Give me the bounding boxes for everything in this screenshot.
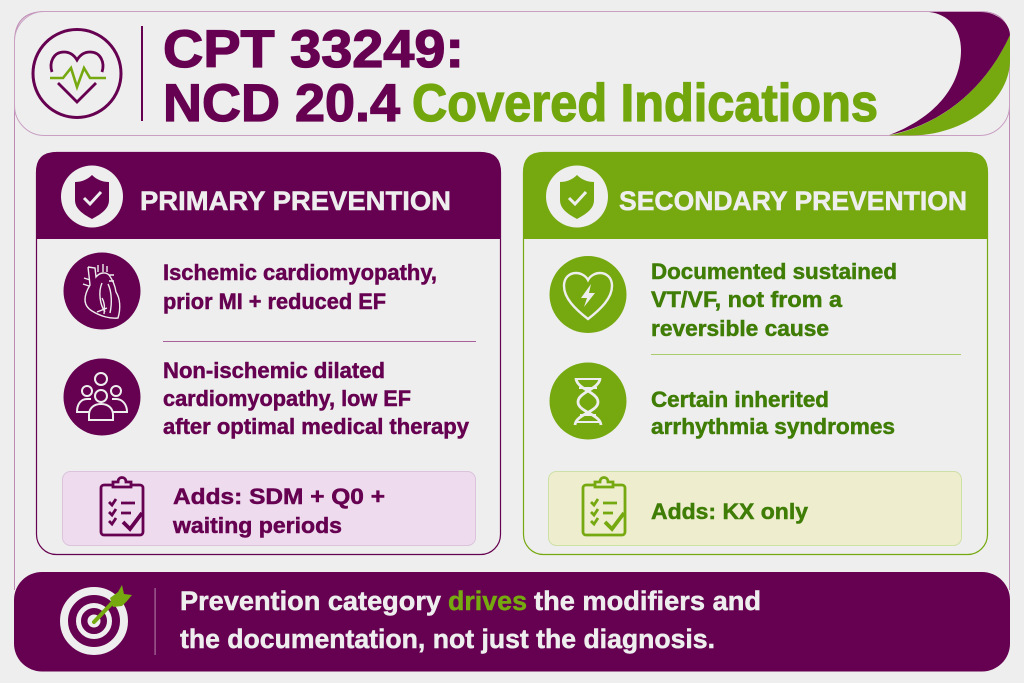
footer banner xyxy=(14,572,1010,672)
panel: secondary prevention xyxy=(523,152,988,554)
title: NCD 20.4 xyxy=(163,74,401,133)
footer message: the modifiers and xyxy=(534,586,761,616)
text: adds SDM Q0 waiting periods xyxy=(172,484,385,538)
primary header bar xyxy=(36,152,501,239)
text: adds SDM Q0 waiting periods: Adds: SDM + Q0 + xyxy=(173,484,385,509)
icon: checklist clipboard xyxy=(101,478,143,535)
text: documented sustained VT/VF xyxy=(651,259,897,341)
text: certain inherited arrhythmia syndromes: Certain inherited xyxy=(651,387,829,412)
text: ischemic cardiomyopathy xyxy=(163,260,437,314)
header panel xyxy=(14,12,1010,136)
text: certain inherited arrhythmia syndromes: arrhythmia syndromes xyxy=(651,414,895,439)
icon: target with dart xyxy=(64,585,132,651)
text: non-ischemic dilated cardiomyopathy: after optimal medical therapy xyxy=(163,414,470,439)
text: certain inherited arrhythmia syndromes xyxy=(651,387,895,439)
text: adds SDM Q0 waiting periods: waiting periods xyxy=(172,513,342,538)
text: non-ischemic dilated cardiomyopathy: Non-ischemic dilated xyxy=(163,358,385,383)
title xyxy=(163,20,878,133)
text: documented sustained VT/VF: VT/VF, not from a xyxy=(651,287,843,312)
icon: heart with pulse xyxy=(33,30,121,118)
text: ischemic cardiomyopathy: Ischemic cardiomyopathy, xyxy=(163,260,437,285)
callout: secondary adds xyxy=(548,472,962,546)
primary heading: PRIMARY PREVENTION xyxy=(140,186,451,216)
corner swoosh: purple xyxy=(889,12,1010,135)
footer message xyxy=(180,586,761,654)
secondary heading: SECONDARY PREVENTION xyxy=(619,186,967,216)
corner swoosh: green xyxy=(889,35,1010,136)
title: Covered Indications xyxy=(412,74,878,133)
icon: anatomical heart xyxy=(64,252,140,330)
icon: checklist clipboard xyxy=(583,478,625,535)
icon: shield with check xyxy=(61,166,123,228)
text: documented sustained VT/VF: reversible cause xyxy=(651,316,829,341)
icon: heart with lightning bolt xyxy=(550,256,626,333)
footer message: drives xyxy=(448,586,527,616)
text: non-ischemic dilated cardiomyopathy: cardiomyopathy, low EF xyxy=(163,386,411,411)
icon: shield with check xyxy=(546,166,608,228)
footer message: Prevention category xyxy=(180,586,441,616)
text: adds KX only: Adds: KX only xyxy=(651,499,809,524)
icon: group of people xyxy=(64,358,140,436)
secondary header bar xyxy=(523,152,988,239)
footer message: the documentation, not just the diagnosis. xyxy=(180,624,715,654)
text: documented sustained VT/VF: Documented sustained xyxy=(651,259,897,284)
icon: DNA helix xyxy=(550,362,626,440)
text: ischemic cardiomyopathy: prior MI + reduced EF xyxy=(163,289,386,314)
title: CPT 33249: xyxy=(163,20,464,79)
text: non-ischemic dilated cardiomyopathy xyxy=(163,358,470,439)
panel: primary prevention xyxy=(36,152,501,554)
title divider xyxy=(141,26,143,121)
callout: primary adds xyxy=(62,472,476,546)
